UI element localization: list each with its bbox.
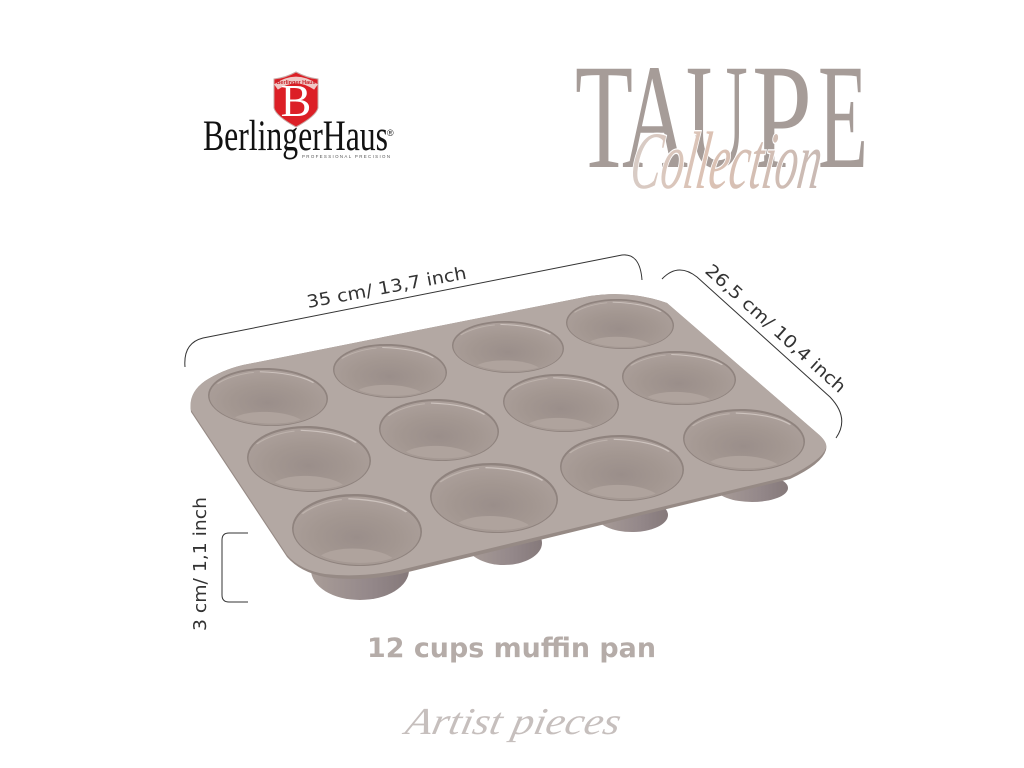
bracket line: [222, 533, 248, 602]
Collection script: Collection: [625, 115, 828, 206]
bracket line: [662, 270, 842, 438]
Taupe title: U: [686, 34, 748, 200]
icon: red shield: [274, 72, 318, 127]
bracket line: [185, 255, 642, 367]
Taupe title: E: [818, 34, 868, 200]
icon: red shield: B: [281, 75, 311, 126]
Taupe title: [575, 34, 868, 200]
registered mark: ®: [387, 128, 394, 138]
Taupe title: T: [575, 34, 633, 200]
back row cups: [207, 297, 675, 428]
middle row cups: [246, 349, 737, 494]
dimension: width: [662, 261, 849, 438]
cup feet: [311, 474, 788, 600]
caption: 12 cups muffin pan: [367, 633, 656, 664]
dimension: height: [191, 497, 248, 631]
pan body: [191, 294, 826, 575]
signature: Artist pieces: Artist pieces: [399, 701, 625, 743]
logo: Taupe Collection: [575, 34, 868, 206]
width label: 26,5 cm/ 10,4 inch: [701, 261, 849, 397]
length label: 35 cm/ 13,7 inch: [305, 264, 468, 313]
Taupe title: P: [752, 34, 812, 200]
front row cups: [291, 407, 806, 568]
dimension: length: [185, 255, 642, 367]
icon: red shield: Berlinger Haus: [276, 80, 316, 86]
wordmark: BerlingerHaus: [203, 113, 388, 160]
logo: Berlinger Haus: [203, 72, 394, 160]
pan rim shadow: [191, 294, 826, 579]
tagline: PROFESSIONAL PRECISION: [302, 154, 390, 159]
Taupe title: A: [622, 34, 688, 200]
muffin pan: [191, 294, 826, 600]
height label: 3 cm/ 1,1 inch: [191, 497, 211, 631]
